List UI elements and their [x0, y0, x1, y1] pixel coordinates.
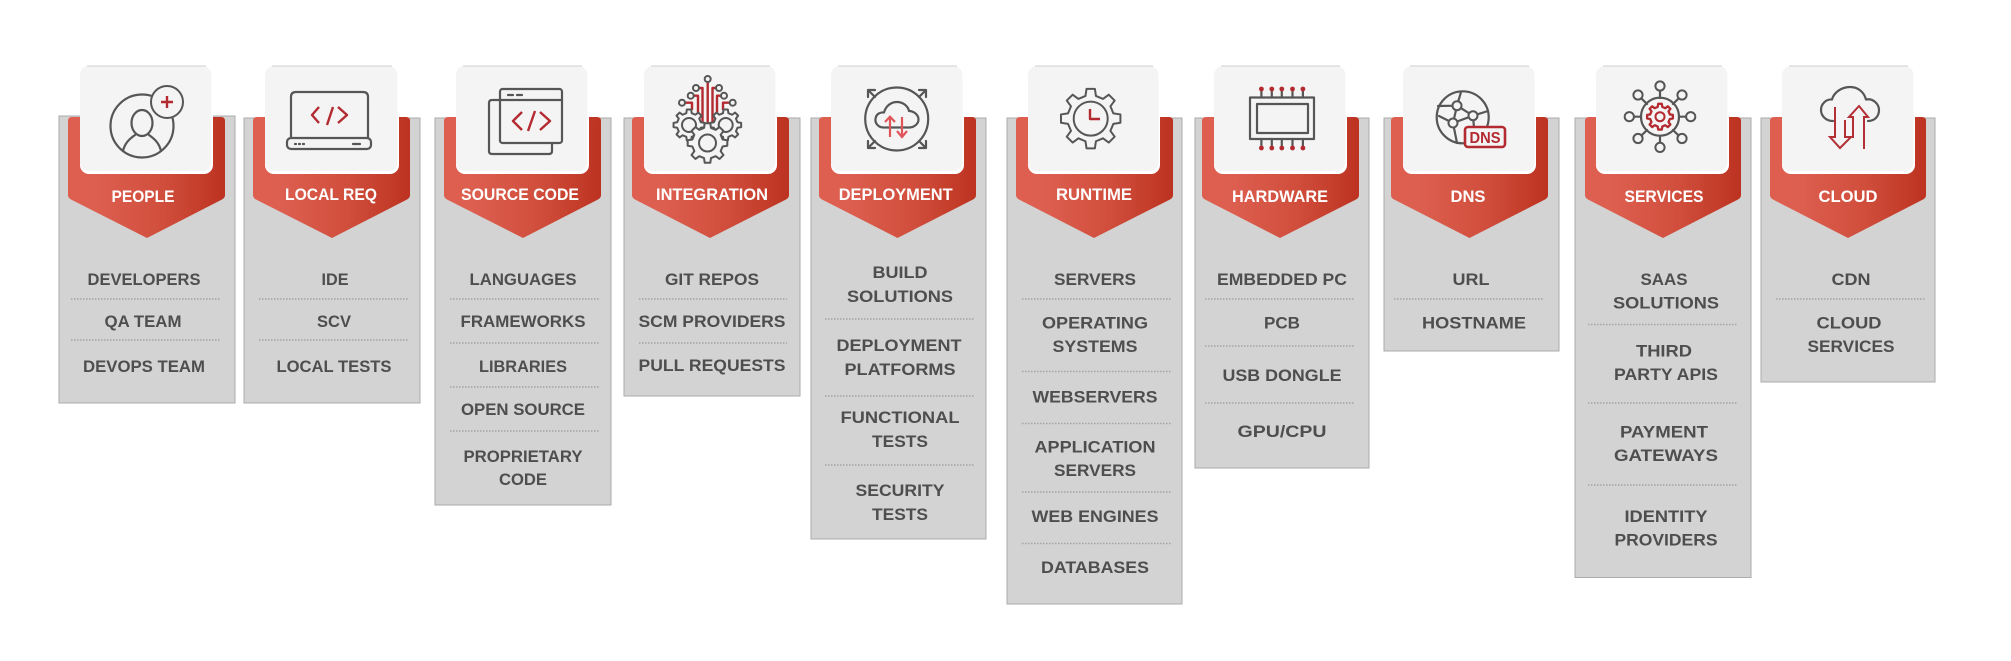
item [1614, 507, 1718, 550]
column: cloud [1761, 66, 1935, 382]
item: CDN [1832, 270, 1870, 289]
item [1614, 342, 1718, 384]
item: OPERATING [1042, 314, 1148, 332]
list items [825, 263, 974, 524]
item: BUILD [872, 263, 928, 282]
icon card [80, 66, 213, 174]
item [464, 447, 583, 489]
icon: person with plus [110, 86, 183, 158]
list items [259, 270, 408, 376]
list items [450, 270, 599, 489]
list items [71, 270, 220, 376]
icon card [831, 66, 964, 174]
item: LOCAL TESTS [276, 357, 392, 376]
heading: SERVICES [1624, 187, 1704, 206]
item: THIRD [1636, 342, 1692, 361]
column: people [59, 66, 235, 403]
panel background [1761, 118, 1935, 382]
column: dns [1384, 66, 1559, 351]
list items [638, 270, 787, 375]
item: SECURITY [856, 481, 945, 500]
item: DEPLOYMENT [836, 336, 962, 355]
item: PULL REQUESTS [638, 356, 786, 375]
item: DEVOPS TEAM [83, 357, 205, 376]
item: DATABASES [1041, 558, 1149, 577]
icon card [265, 66, 399, 174]
banner [253, 117, 410, 238]
column: integration [624, 66, 800, 396]
list items [1394, 270, 1543, 332]
item: WEB ENGINES [1032, 507, 1158, 526]
item [1034, 438, 1156, 480]
item [840, 408, 960, 451]
item [847, 263, 953, 306]
item: PLATFORMS [844, 360, 956, 379]
heading: DEPLOYMENT [839, 185, 953, 204]
column: services [1575, 66, 1751, 578]
panel background [244, 118, 420, 403]
item [836, 336, 962, 379]
item: PAYMENT [1620, 422, 1709, 441]
panel background [435, 118, 611, 505]
icon card [456, 66, 589, 174]
item: APPLICATION [1034, 438, 1156, 456]
column: hardware [1195, 66, 1369, 468]
banner [1585, 117, 1741, 238]
item: FUNCTIONAL [840, 408, 960, 427]
item [1614, 422, 1718, 465]
item: DEVELOPERS [88, 270, 200, 289]
item: IDE [322, 270, 348, 289]
banner [444, 117, 601, 238]
heading: RUNTIME [1056, 185, 1132, 204]
icon card [1596, 66, 1729, 174]
icon: code windows [489, 89, 562, 154]
icon: laptop with code [287, 92, 371, 149]
item: LANGUAGES [470, 270, 576, 289]
icon card [1028, 66, 1160, 174]
heading: CLOUD [1818, 187, 1878, 206]
icon: dns globe: DNS [1470, 130, 1501, 147]
panel background [1575, 118, 1751, 578]
item: SAAS [1640, 270, 1688, 289]
item [1042, 314, 1148, 356]
item [856, 481, 945, 524]
heading: LOCAL REQ [285, 185, 377, 204]
item: PROVIDERS [1614, 531, 1718, 550]
panel background [624, 118, 800, 396]
item: TESTS [872, 432, 928, 451]
banner [1202, 117, 1359, 238]
banner [632, 117, 789, 238]
item: GIT REPOS [665, 270, 759, 289]
banner [68, 117, 225, 238]
panel background [1195, 118, 1369, 468]
item: SOLUTIONS [847, 287, 953, 306]
item: WEBSERVERS [1032, 388, 1158, 406]
column: deployment [811, 66, 986, 539]
item: CODE [499, 470, 547, 489]
heading: HARDWARE [1232, 187, 1328, 206]
item: USB DONGLE [1222, 366, 1342, 385]
item: EMBEDDED PC [1217, 270, 1347, 289]
item: SERVICES [1808, 337, 1894, 356]
panel background [1007, 118, 1182, 604]
item: IDENTITY [1624, 507, 1708, 526]
item: SCV [317, 312, 352, 331]
item: SCM PROVIDERS [638, 312, 786, 331]
item: TESTS [872, 505, 928, 524]
heading: INTEGRATION [656, 185, 768, 204]
heading: DNS [1450, 187, 1486, 206]
item: GPU/CPU [1238, 422, 1326, 441]
item [1613, 270, 1719, 312]
icon card [1782, 66, 1915, 174]
item: GATEWAYS [1614, 446, 1718, 465]
item: PCB [1264, 314, 1300, 332]
icon: circuit board [1250, 87, 1314, 150]
list items [1022, 270, 1171, 577]
icon: cloud with arrows [1821, 87, 1879, 149]
item: URL [1452, 270, 1490, 289]
banner [1391, 117, 1548, 238]
item: SOLUTIONS [1613, 294, 1719, 312]
item: OPEN SOURCE [461, 400, 585, 419]
heading: SOURCE CODE [461, 185, 579, 204]
icon: gears and circuit [674, 76, 741, 163]
item: CLOUD [1816, 314, 1882, 332]
icon: service network gear [1625, 81, 1695, 152]
item: SYSTEMS [1052, 337, 1138, 356]
item: SERVERS [1054, 270, 1136, 289]
heading: PEOPLE [112, 187, 174, 206]
panel background [1384, 118, 1559, 351]
panel background [811, 118, 986, 539]
icon: cloud transfer [865, 88, 928, 150]
icon card [1403, 66, 1536, 174]
item [1808, 314, 1894, 356]
list items [1205, 270, 1354, 441]
panel background [59, 116, 235, 403]
column: local req [244, 66, 420, 403]
column: runtime [1007, 66, 1182, 604]
item: QA TEAM [104, 312, 182, 331]
banner [819, 117, 976, 238]
item: LIBRARIES [479, 357, 567, 376]
column: source code [435, 66, 611, 505]
item: HOSTNAME [1422, 314, 1526, 332]
icon card [644, 66, 777, 174]
list items [1588, 270, 1737, 550]
banner [1770, 117, 1926, 238]
icon: gear clock [1061, 89, 1120, 148]
item: FRAMEWORKS [460, 312, 586, 331]
item: PARTY APIS [1614, 365, 1718, 384]
list items [1776, 270, 1925, 356]
banner [1016, 117, 1173, 238]
icon card [1214, 66, 1347, 174]
icon: dns globe [1437, 91, 1505, 147]
item: PROPRIETARY [464, 447, 583, 466]
item: SERVERS [1054, 461, 1136, 480]
